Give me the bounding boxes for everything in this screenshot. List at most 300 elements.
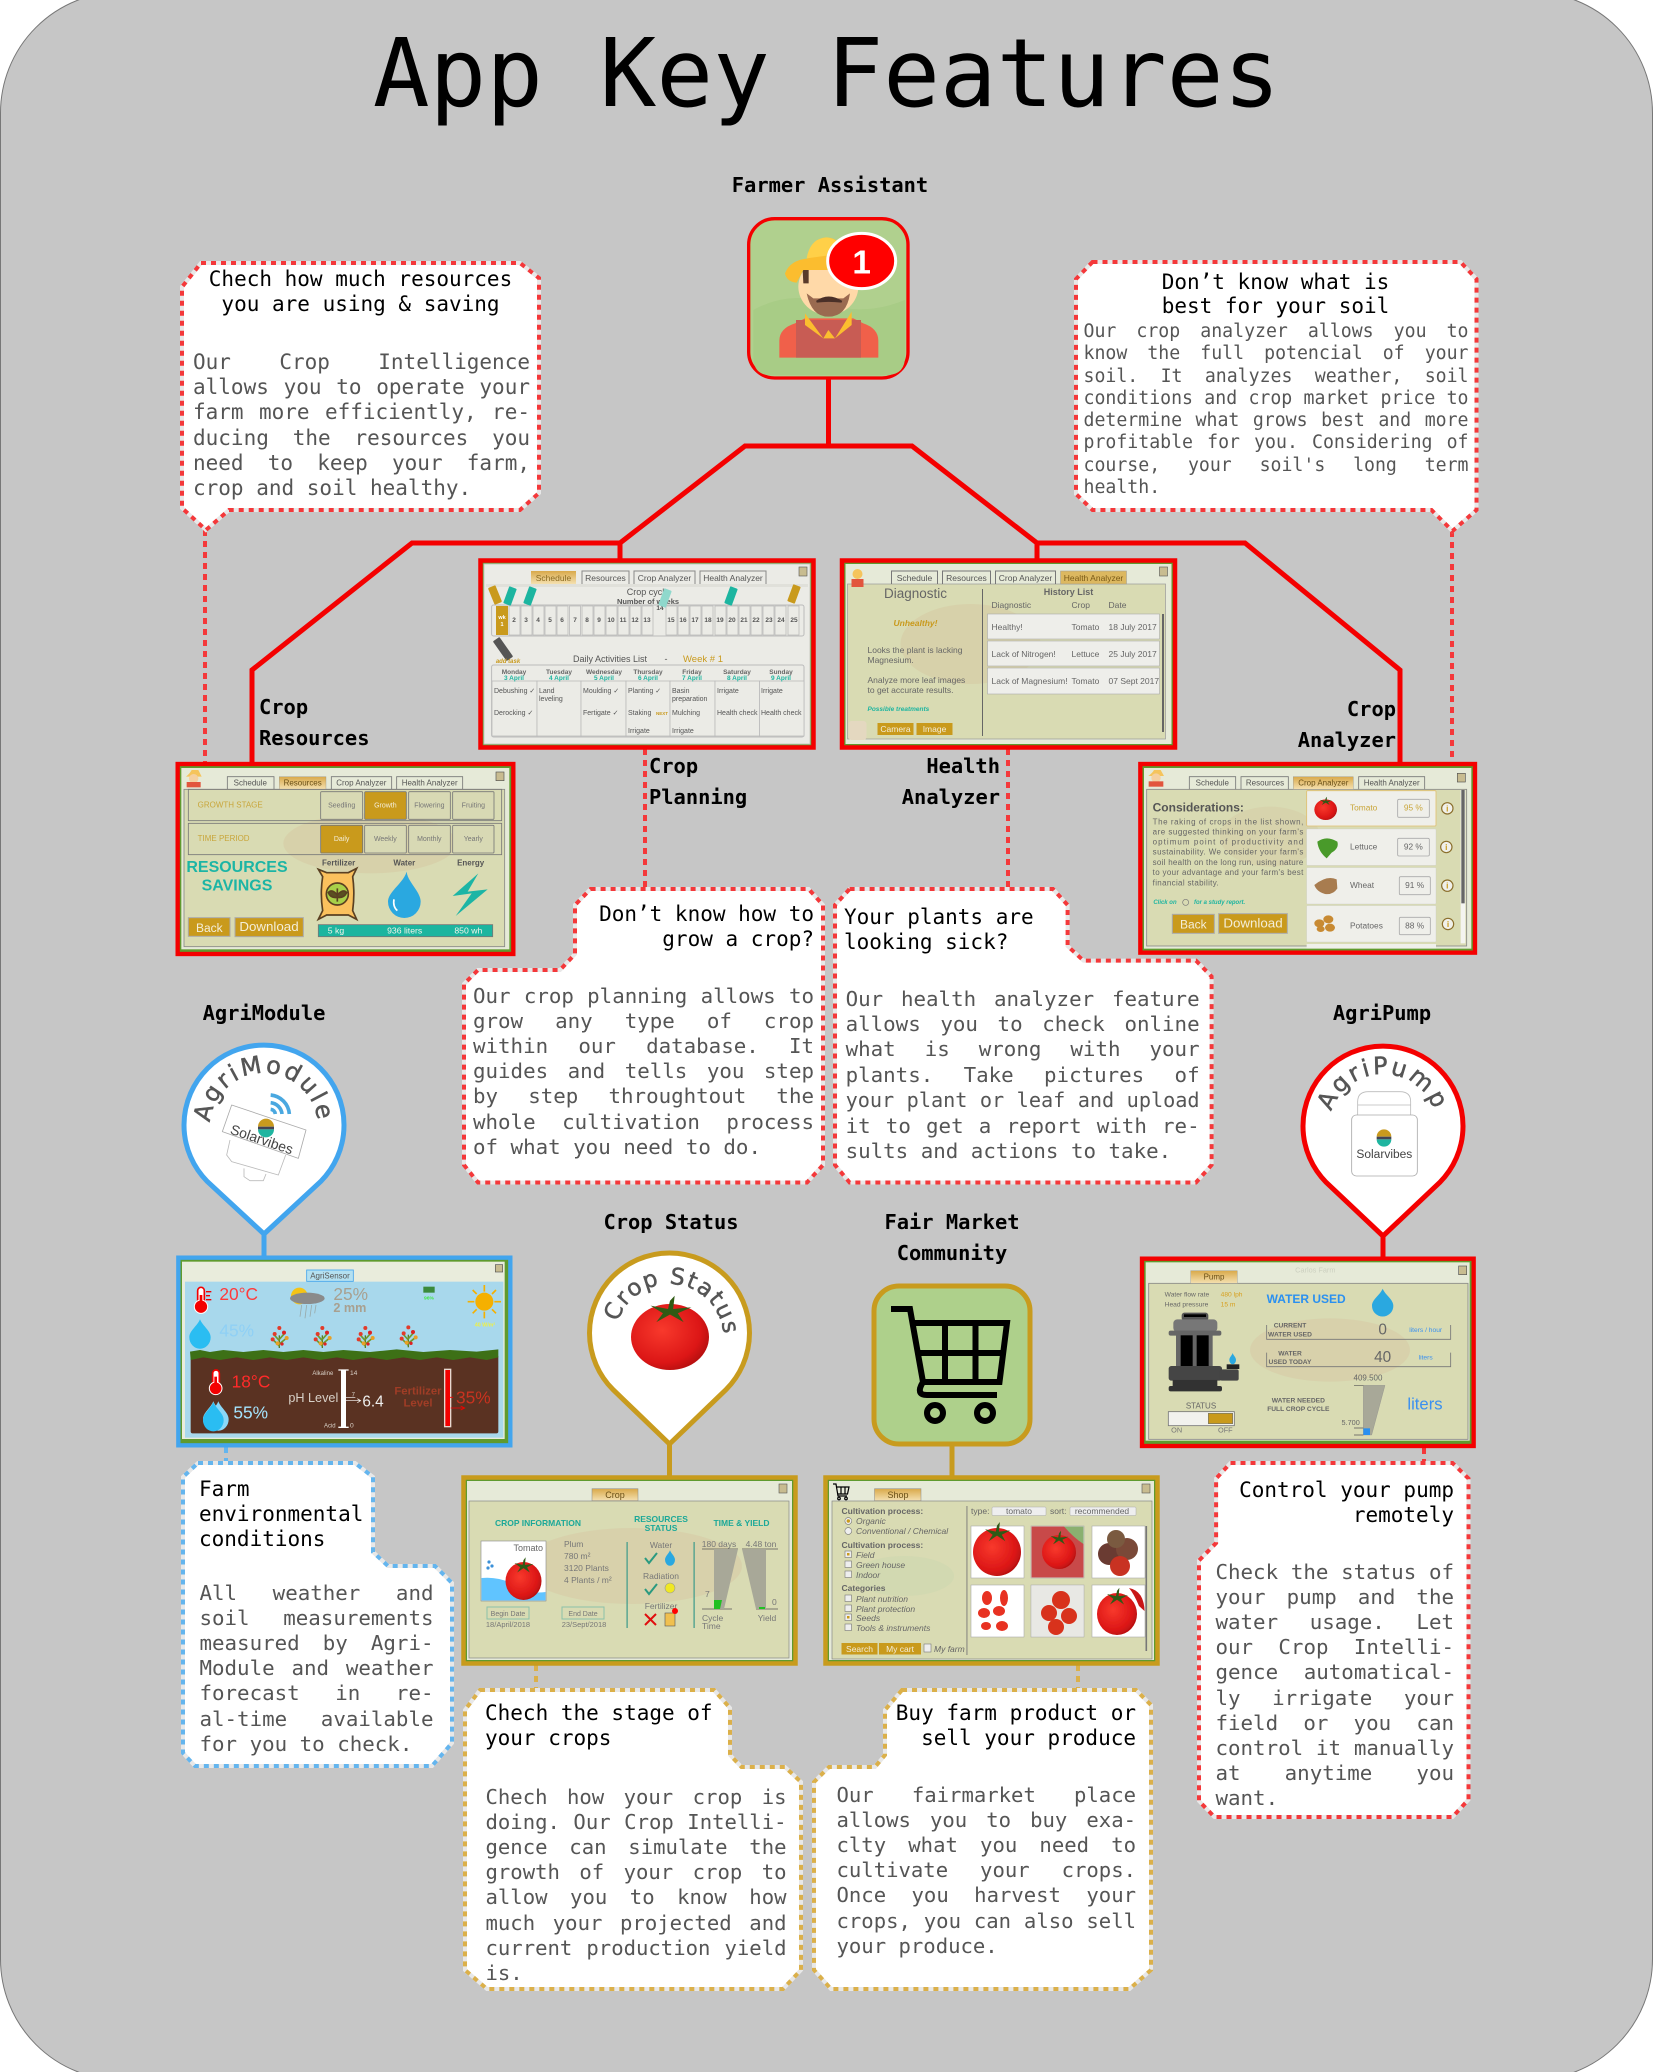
callout body: Our Crop Intelligence [193, 350, 530, 374]
callout body: for you to check. [200, 1732, 412, 1756]
history list: 07 Sept 2017 [1108, 676, 1159, 686]
pump sketch: Solarvibes [1356, 1147, 1412, 1161]
crop ranking cards: 88 % [1405, 920, 1425, 930]
callout body: grow any type of crop [473, 1009, 814, 1033]
callout body: al-time available [200, 1707, 434, 1731]
pH gauge: Alkaline [312, 1371, 334, 1377]
savings icons: Fertilizer [322, 858, 355, 867]
filters: Conventional / Chemical [856, 1526, 949, 1536]
crop ranking cards: i [1447, 919, 1449, 929]
filters: Cultivation process: [842, 1506, 923, 1516]
label: Health Analyzer: Analyzer [902, 785, 1000, 809]
callout body: Our crop planning allows to [473, 984, 814, 1008]
status switch: ON [1171, 1426, 1182, 1435]
callout body: your pump and the [1216, 1585, 1454, 1609]
pump sketch [1352, 1092, 1417, 1176]
panel: crop status screen [464, 1478, 796, 1664]
callout body: want. [1216, 1786, 1278, 1810]
history list: Crop [1072, 600, 1090, 610]
callout body [1216, 1560, 1454, 1810]
savings icons [318, 858, 488, 919]
callout body: gence automatical- [1216, 1660, 1454, 1684]
callout heading: you are using & saving [221, 292, 500, 316]
crop details: 23/Sept/2018 [562, 1620, 606, 1629]
callout body: Module and weather [200, 1656, 434, 1680]
crop ranking cards [1307, 791, 1454, 948]
callout body: measured by Agri- [200, 1631, 434, 1655]
history list: Date [1108, 600, 1127, 610]
callout heading: Chech the stage of [485, 1700, 713, 1724]
week timeline [488, 584, 804, 661]
week timeline: 21 [740, 617, 748, 624]
crop ranking cards: Tomato [1350, 803, 1378, 813]
diagnostic column: Image [923, 724, 947, 734]
callout body: soil. It analyzes weather, soil [1084, 366, 1468, 387]
week timeline: 3 [524, 617, 528, 624]
crop details: 3120 Plants [564, 1563, 609, 1573]
tabs: Crop Analyzer [1298, 779, 1349, 788]
savings icons: Water [393, 858, 415, 867]
considerations text: The raking of crops in the list shown, [1153, 817, 1303, 826]
resources status: Water [650, 1540, 672, 1550]
savings values bar [318, 925, 493, 937]
callout: farm environmental conditions [181, 1461, 454, 1768]
callout body: allows you to buy exa- [836, 1808, 1136, 1832]
callout heading: best for your soil [1162, 294, 1389, 318]
callout heading: Don’t know what is [1162, 270, 1389, 294]
status switch [1168, 1401, 1234, 1435]
buttons: Back [196, 921, 224, 935]
label: Crop Resources [259, 695, 370, 750]
callout body: determine what grows best and more [1084, 410, 1468, 431]
panel: crop analyzer screen [1140, 764, 1475, 953]
section headers: CROP INFORMATION [495, 1518, 581, 1528]
crop details: End Date [568, 1611, 598, 1618]
air readings [189, 1284, 258, 1349]
callout body: course, your soil's long term [1084, 455, 1468, 476]
callout: best for your soil [1074, 260, 1478, 534]
history list: 25 July 2017 [1108, 649, 1157, 659]
week timeline: 2 [512, 617, 516, 624]
tabs [227, 777, 463, 789]
callout body: gence can simulate the [486, 1835, 786, 1859]
callout body [846, 986, 1200, 1163]
resources savings title: RESOURCES [186, 859, 288, 876]
resources status: Radiation [643, 1571, 679, 1581]
section headers [495, 1514, 770, 1533]
savings values bar: 936 liters [387, 926, 423, 936]
daily activities table: Irrigate [672, 728, 694, 735]
tabs: Schedule [1196, 779, 1230, 788]
growth stage selector [188, 789, 502, 821]
panel: health analyzer screen [842, 560, 1175, 748]
time period selector: Weekly [374, 836, 397, 843]
panel: fair market shop screen [826, 1478, 1158, 1664]
callout heading [209, 267, 512, 316]
filters: Seeds [856, 1613, 881, 1623]
label: AgriPump: AgriPump [1333, 1001, 1431, 1025]
callout heading: Don’t know how to [599, 902, 814, 926]
week timeline: 25 [790, 617, 798, 624]
callout heading: conditions [199, 1527, 325, 1551]
daily activities table: Derocking ✓ [494, 710, 533, 717]
daily activities table: Thursday [633, 669, 663, 676]
callout body: current production yield [486, 1936, 786, 1960]
callout body: clty what you need to [836, 1833, 1136, 1857]
tabs: Crop Analyzer [638, 573, 691, 583]
history list: Diagnostic [992, 600, 1032, 610]
callout body [836, 1782, 1136, 1958]
soil [190, 1349, 498, 1433]
curved label: AgriModule [194, 1055, 330, 1123]
week timeline: 8 [585, 617, 589, 624]
savings values bar: 5 kg [328, 926, 344, 936]
panel: AgriModule sensor screen [178, 1258, 510, 1445]
time period selector: Monthly [417, 836, 442, 843]
pin: Crop Status [587, 1250, 752, 1476]
callout body: what is wrong with your [846, 1037, 1200, 1061]
crop ranking cards: i [1446, 803, 1448, 813]
pH gauge: 7 [352, 1393, 356, 1399]
daily activities table: Health check [717, 710, 758, 717]
panel: AgriPump control screen: Carlos Farm [1295, 1266, 1335, 1275]
daily activities table: Staking [628, 710, 651, 717]
week timeline: 15 [667, 617, 675, 624]
crop details: 4 Plants / m² [564, 1575, 612, 1585]
week timeline: 9 [597, 617, 601, 624]
callout body: Our health analyzer feature [846, 986, 1200, 1010]
callout body: field or you can [1216, 1711, 1454, 1735]
tab [307, 1270, 353, 1281]
sort controls: tomato [1006, 1506, 1032, 1516]
crop ranking cards: i [1446, 881, 1448, 891]
crop card [481, 1541, 546, 1601]
tabs: Health Analyzer [402, 779, 458, 788]
growth stage selector: Seedling [328, 802, 355, 809]
callout heading [844, 904, 1034, 954]
time period selector: TIME PERIOD [198, 834, 250, 843]
week timeline: wk [497, 615, 507, 621]
label: Crop Resources: Crop [259, 695, 308, 719]
section headers: RESOURCES [634, 1514, 688, 1524]
callout body: forecast in re- [200, 1681, 434, 1705]
callout body [486, 1784, 786, 1985]
week timeline: 6 [560, 617, 564, 624]
pin: AgriModule [182, 1042, 346, 1256]
daily activities table: Irrigate [761, 688, 783, 695]
tabs [1189, 777, 1425, 789]
label: Crop Planning: Planning [649, 785, 747, 809]
growth stage selector: GROWTH STAGE [198, 800, 263, 809]
savings icons: Energy [457, 858, 485, 867]
water needed gauge: liters [1407, 1395, 1443, 1414]
tabs: Schedule [234, 779, 268, 788]
title: App Key Features [373, 20, 1280, 129]
callout heading: remotely [1353, 1502, 1454, 1526]
considerations text: to your advantage and your farm's best [1153, 868, 1304, 877]
water used: WATER USED [1268, 1332, 1312, 1339]
tabs: Schedule [897, 573, 932, 583]
callout body: profitable for you. Considering of [1084, 432, 1468, 453]
daily activities table: Planting ✓ [628, 688, 661, 695]
crop ranking cards: Wheat [1350, 880, 1375, 890]
callout body: it to get a report with re- [846, 1114, 1200, 1138]
diagnostic column: Possible treatments [868, 706, 930, 713]
tab [874, 1489, 921, 1501]
section headers: TIME & YIELD [713, 1518, 770, 1528]
callout body [193, 350, 530, 500]
callout body: Our crop analyzer allows you to [1084, 321, 1468, 342]
time and yield chart: Yield [758, 1613, 777, 1623]
buttons [1172, 914, 1287, 933]
fertilizer gauge: 35% [456, 1387, 491, 1407]
crop ranking cards: i [1445, 842, 1447, 852]
water used: FULL CROP CYCLE [1267, 1406, 1330, 1413]
icon: shopping cart [874, 1286, 1030, 1476]
growth stage selector: Growth [374, 802, 397, 809]
label: Crop Analyzer [1298, 697, 1396, 752]
air readings: 45% [219, 1321, 254, 1341]
daily activities table: Saturday [723, 669, 751, 676]
pH gauge: pH Level [288, 1391, 338, 1405]
water used: 0 [1378, 1321, 1387, 1338]
daily activities table: Moulding ✓ [583, 688, 619, 695]
callout body: guides and tells you step [473, 1059, 814, 1083]
history list: History List [1044, 587, 1093, 597]
plants [271, 1326, 289, 1348]
callout body [200, 1580, 434, 1756]
week timeline: 1 [500, 622, 504, 628]
callout body: your plant or leaf and upload [846, 1088, 1200, 1112]
filters: Field [856, 1550, 875, 1560]
daily activities table: Land [539, 688, 555, 695]
callout body: your produce. [836, 1934, 998, 1958]
callout body: health. [1084, 477, 1160, 498]
week timeline: 7 [573, 617, 577, 624]
callout body: crop and soil healthy. [193, 476, 471, 500]
label: Crop Planning [649, 754, 747, 809]
daily activities table: 9 April [771, 675, 791, 682]
crop ranking cards: 95 % [1404, 803, 1423, 813]
dashed connectors to callouts [205, 530, 1452, 1690]
tabs [531, 571, 766, 584]
history list: Tomato [1072, 676, 1100, 686]
tabs: Resources [585, 573, 626, 583]
callout body: plants. Take pictures of [846, 1063, 1200, 1087]
time period selector: Daily [334, 836, 350, 843]
week timeline: 10 [607, 617, 615, 624]
callout body: allows you to check online [846, 1012, 1200, 1036]
pH gauge: Acid [324, 1424, 336, 1430]
label: Health Analyzer [902, 754, 1000, 809]
pump specs [1165, 1292, 1243, 1309]
callout heading: Chech how much resources [209, 267, 512, 291]
week timeline: Number of weeks [617, 597, 679, 606]
tabs: Health Analyzer [703, 573, 763, 583]
tabs: Resources [284, 779, 322, 788]
water used: USED TODAY [1269, 1359, 1312, 1366]
tab [1191, 1271, 1237, 1283]
label: Crop Status: Crop Status [603, 1210, 739, 1234]
callout: plants looking sick [833, 887, 1214, 1184]
considerations text: soil health on the long run, using nature [1153, 858, 1304, 867]
week timeline: 23 [765, 617, 773, 624]
week timeline: 13 [643, 617, 651, 624]
callout: control your pump [1197, 1461, 1470, 1819]
icon: farmer [1148, 770, 1164, 787]
callout body: doing. Our Crop Intelli- [486, 1810, 786, 1834]
callout heading [485, 1700, 713, 1750]
considerations text [1153, 801, 1304, 906]
time and yield chart: 7 [705, 1589, 710, 1599]
water used: liters [1419, 1355, 1433, 1362]
status switch: STATUS [1186, 1401, 1216, 1410]
soil readings [203, 1370, 270, 1431]
curved label: Crop Status [604, 1267, 736, 1333]
panel: AgriPump control screen [1142, 1259, 1474, 1446]
daily activities table: 3 April [504, 675, 524, 682]
callout: resources and savings [180, 261, 541, 533]
callout body: need to keep your farm, [193, 451, 530, 475]
daily activities table: NEXT [656, 711, 668, 716]
crop ranking cards: 92 % [1404, 841, 1423, 851]
callout heading [199, 1476, 363, 1551]
callout: stage of your crops [463, 1688, 803, 1991]
filters: Cultivation process: [842, 1540, 923, 1550]
daily activities table [492, 654, 804, 737]
tabs: Resources [946, 573, 987, 583]
time and yield chart: 180 days [702, 1539, 736, 1549]
considerations text: Click on [1153, 900, 1177, 906]
week timeline: 12 [631, 617, 639, 624]
callout body: of what you need to do. [473, 1135, 761, 1159]
considerations text: are suggested thinking on your farm's [1153, 828, 1303, 837]
callout body: All weather and [200, 1580, 434, 1604]
callout body: Check the status of [1216, 1560, 1454, 1584]
considerations text: sustainability. We consider your farm's [1153, 848, 1303, 857]
tabs [892, 571, 1126, 584]
crop details: 18/April/2018 [486, 1620, 530, 1629]
callout heading: your crops [485, 1726, 611, 1750]
callout body: ducing the resources you [193, 426, 530, 450]
water needed gauge [1341, 1374, 1443, 1435]
label: AgriModule: AgriModule [203, 1001, 325, 1025]
forecast [290, 1284, 435, 1318]
callout heading: grow a crop? [662, 926, 814, 950]
crop ranking cards: Lettuce [1350, 841, 1378, 851]
history list: Lack of Nitrogen! [992, 649, 1056, 659]
device sketch [222, 1095, 306, 1181]
tomato [631, 1296, 709, 1370]
diagnostic column [848, 586, 965, 740]
sun [468, 1285, 501, 1328]
callout heading: Control your pump [1239, 1478, 1454, 1502]
water used: 40 [1374, 1349, 1391, 1366]
time period selector [188, 823, 502, 855]
label: Crop Analyzer: Analyzer [1298, 728, 1396, 752]
callout heading: Your plants are [844, 904, 1034, 928]
daily activities table: add task [496, 659, 521, 665]
pin: AgriPump [1300, 1044, 1466, 1256]
history list [988, 587, 1160, 694]
fertilizer gauge [394, 1369, 491, 1427]
week timeline: 17 [691, 617, 699, 624]
water needed gauge: 5.700 [1341, 1418, 1360, 1427]
filters: Tools & instruments [856, 1623, 931, 1633]
time period selector: Yearly [464, 836, 483, 843]
history list: Healthy! [992, 622, 1023, 632]
daily activities table: 4 April [549, 675, 569, 682]
status switch: OFF [1218, 1426, 1233, 1435]
pump specs: Head pressure [1165, 1302, 1209, 1309]
filters: Plant nutrition [856, 1594, 908, 1604]
label: Crop Analyzer: Crop [1347, 697, 1396, 721]
resources savings title: SAVINGS [202, 877, 273, 894]
sort controls: sort: [1050, 1506, 1067, 1516]
crop details: 780 m² [564, 1551, 591, 1561]
tab [592, 1489, 638, 1501]
fertilizer gauge: Fertilizer [394, 1386, 442, 1398]
notification badge: 1 [852, 244, 871, 281]
buttons [842, 1643, 965, 1654]
growth stage selector: Fruiting [462, 802, 485, 809]
tabs: Crop Analyzer [999, 573, 1052, 583]
buttons: My farm [934, 1644, 965, 1654]
callout heading: looking sick? [844, 930, 1008, 954]
water used: liters / hour [1409, 1327, 1443, 1334]
pH gauge: 0 [350, 1422, 354, 1429]
pump specs: 480 lph [1221, 1292, 1243, 1299]
forecast: 96% [424, 1296, 435, 1302]
filters [842, 1506, 949, 1633]
pH gauge [288, 1370, 384, 1430]
daily activities table: leveling [539, 696, 563, 703]
callout body: by step throughtout the [473, 1084, 814, 1108]
daily activities table: preparation [672, 696, 708, 703]
water used: CURRENT [1274, 1323, 1306, 1330]
product images [971, 1522, 1145, 1637]
daily activities table: Daily Activities List [573, 654, 648, 664]
crop ranking cards: 91 % [1405, 880, 1425, 890]
week timeline: 20 [728, 617, 736, 624]
time and yield chart: 0 [772, 1597, 777, 1607]
daily activities table: Sunday [769, 669, 793, 676]
callout body [473, 984, 814, 1159]
notification badge [828, 233, 896, 289]
tabs: Health Analyzer [1364, 779, 1420, 788]
callout heading: sell your produce [921, 1726, 1136, 1750]
callout body: sults and actions to take. [846, 1139, 1171, 1163]
week timeline: Crop cycle [627, 587, 669, 597]
icon: farmer assistant [749, 219, 908, 378]
sort controls [971, 1506, 1136, 1516]
callout body: know the full potencial of your [1084, 343, 1468, 364]
device sketch: Solarvibes [228, 1121, 295, 1157]
daily activities table: Health check [761, 710, 802, 717]
daily activities table: 8 April [727, 675, 747, 682]
daily activities table: Mulching [672, 710, 700, 717]
time and yield chart: Time [702, 1621, 721, 1631]
diagnostic column: Analyze more leaf images [868, 675, 965, 685]
history list: Tomato [1072, 622, 1100, 632]
tabs: Crop Analyzer [336, 779, 387, 788]
callout body: crops, you can also sell [836, 1909, 1136, 1933]
tabs: Schedule [536, 573, 571, 583]
callout heading [599, 902, 814, 950]
sort controls: type: [971, 1506, 989, 1516]
panel: crop resources screen [178, 764, 513, 954]
buttons: Download [1223, 915, 1283, 930]
